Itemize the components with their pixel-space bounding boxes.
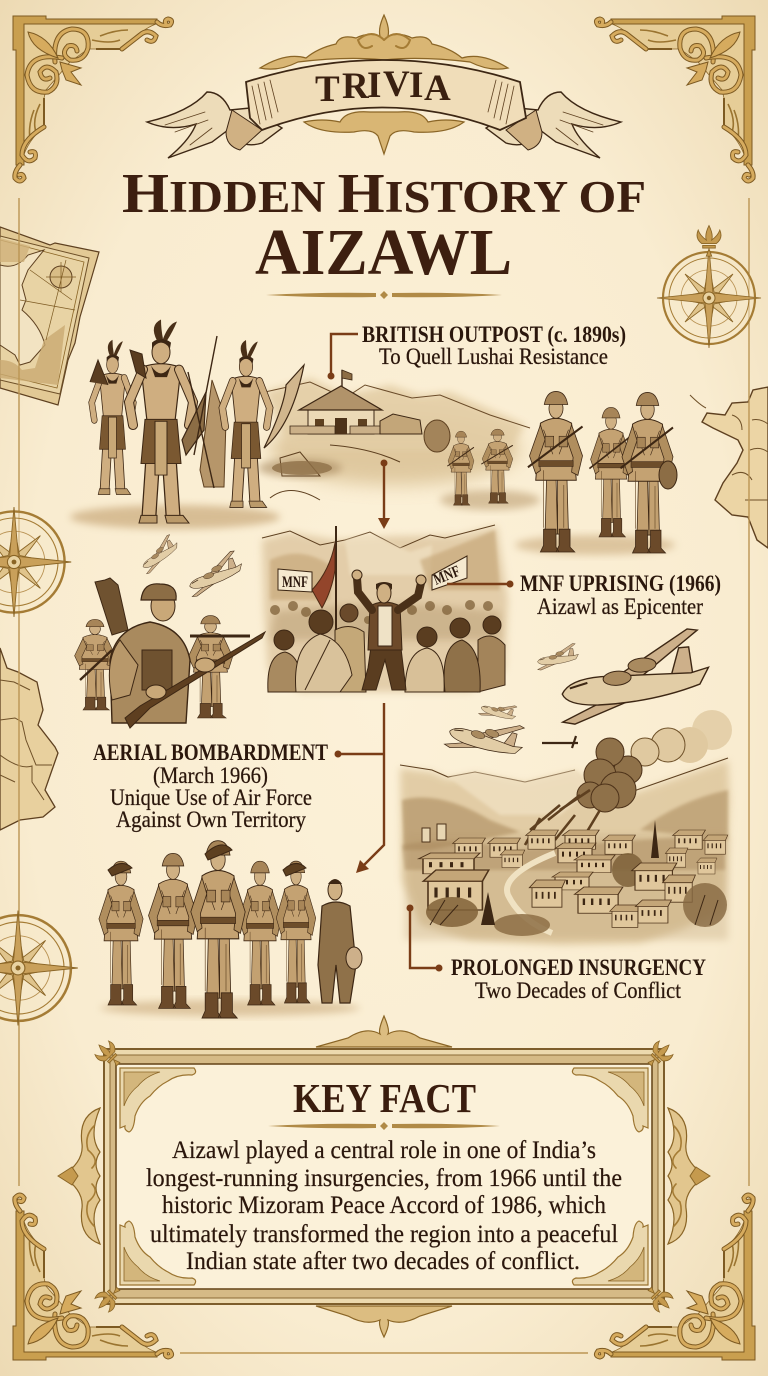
label: aerial bombardment: (March 1966) (153, 763, 268, 788)
illustration: bomber aircraft (444, 627, 712, 782)
landscape wash (70, 378, 675, 555)
key fact heading: KEY FACT (293, 1075, 476, 1121)
key fact body text: ultimately transformed the region into a peaceful (150, 1219, 618, 1248)
background soldiers (75, 616, 250, 718)
label: prolonged insurgency (451, 955, 706, 1003)
warrior figures (90, 320, 304, 523)
decorative map: left lower (0, 648, 58, 830)
ribbon tails (147, 92, 282, 158)
main title (122, 163, 646, 299)
panel left ornament (58, 1108, 100, 1244)
key fact body text: Indian state after two decades of conflict. (186, 1246, 580, 1275)
small soldiers (447, 429, 513, 505)
label: MNF uprising: MNF UPRISING (1966) (520, 571, 721, 596)
panel frame (91, 1037, 677, 1316)
title divider (266, 291, 502, 299)
large soldiers (528, 391, 677, 553)
arrow: outpost to uprising (378, 460, 390, 529)
label: MNF uprising: Aizawl as Epicenter (537, 594, 703, 619)
outpost building (272, 370, 450, 475)
crowd backdrop (262, 525, 508, 692)
decorative map: right (690, 387, 768, 548)
small planes (135, 533, 247, 598)
panel right ornament (668, 1108, 710, 1244)
illustration: soldier with rifle and small aircraft (75, 533, 265, 728)
smoke plume (525, 710, 732, 845)
key fact body text (146, 1135, 622, 1275)
flag (312, 526, 336, 640)
banner: MNF left: MNF (282, 574, 308, 591)
compass: left middle (0, 507, 71, 617)
label: prolonged insurgency: Two Decades of Conflict (475, 978, 682, 1003)
leader line: MNF uprising (447, 580, 514, 588)
corner ornament: top left (13, 16, 172, 181)
crowd figures (268, 600, 505, 692)
banner title: TRIVIA (315, 64, 451, 110)
key fact body text: historic Mizoram Peace Accord of 1986, which (162, 1190, 606, 1219)
ribbon lower ornament (304, 112, 464, 154)
town buildings (402, 820, 728, 936)
label: aerial bombardment (93, 740, 328, 832)
title line 1: HIDDEN HISTORY OF (122, 163, 646, 225)
illustration: burning town (400, 710, 732, 945)
key fact body text: longest-running insurgencies, from 1966 until the (146, 1163, 622, 1192)
ribbon top ornament (260, 15, 508, 69)
decorative map: left upper (0, 227, 99, 405)
compass: top right (657, 226, 761, 348)
leader line: aerial bombardment and arrow to group (334, 703, 384, 873)
page side rules (19, 198, 749, 1353)
illustration: group of six soldiers and civilians (99, 841, 362, 1018)
illustration: MNF uprising crowd (262, 525, 508, 692)
town wash (400, 758, 730, 945)
label: prolonged insurgency: PROLONGED INSURGENCY (451, 955, 706, 980)
banner: MNF left (278, 569, 312, 592)
main soldier (95, 578, 265, 728)
corner ornament: bottom right (596, 1195, 755, 1360)
panel top ornament (316, 1016, 452, 1047)
ribbon centre band (246, 60, 526, 130)
corner ornament: top right (596, 16, 755, 181)
panel: key fact (58, 1016, 710, 1337)
compass: left lower (0, 910, 78, 1026)
label: aerial bombardment: AERIAL BOMBARDMENT (93, 740, 328, 765)
illustration: Lushai warriors and British outpost (70, 320, 677, 555)
leader line: British outpost (328, 334, 358, 380)
leader figure (352, 570, 426, 690)
banner: MNF right: MNF (431, 563, 463, 589)
civilian figure (318, 879, 362, 1003)
trivia ribbon banner (147, 15, 621, 158)
key fact divider (268, 1122, 500, 1130)
panel bottom ornament (316, 1306, 452, 1337)
title line 2: AIZAWL (255, 216, 512, 289)
corner ornament: bottom left (13, 1195, 172, 1360)
leader line: prolonged insurgency (406, 904, 442, 972)
label: British outpost (362, 322, 626, 369)
label: British outpost: BRITISH OUTPOST (c. 1890s) (362, 322, 626, 347)
label: aerial bombardment: Unique Use of Air Force (110, 785, 312, 810)
label: British outpost: To Quell Lushai Resistance (379, 344, 608, 369)
key fact body text: Aizawl played a central role in one of India’s (172, 1135, 596, 1164)
label: aerial bombardment: Against Own Territory (116, 807, 306, 832)
label: MNF uprising (520, 571, 721, 619)
